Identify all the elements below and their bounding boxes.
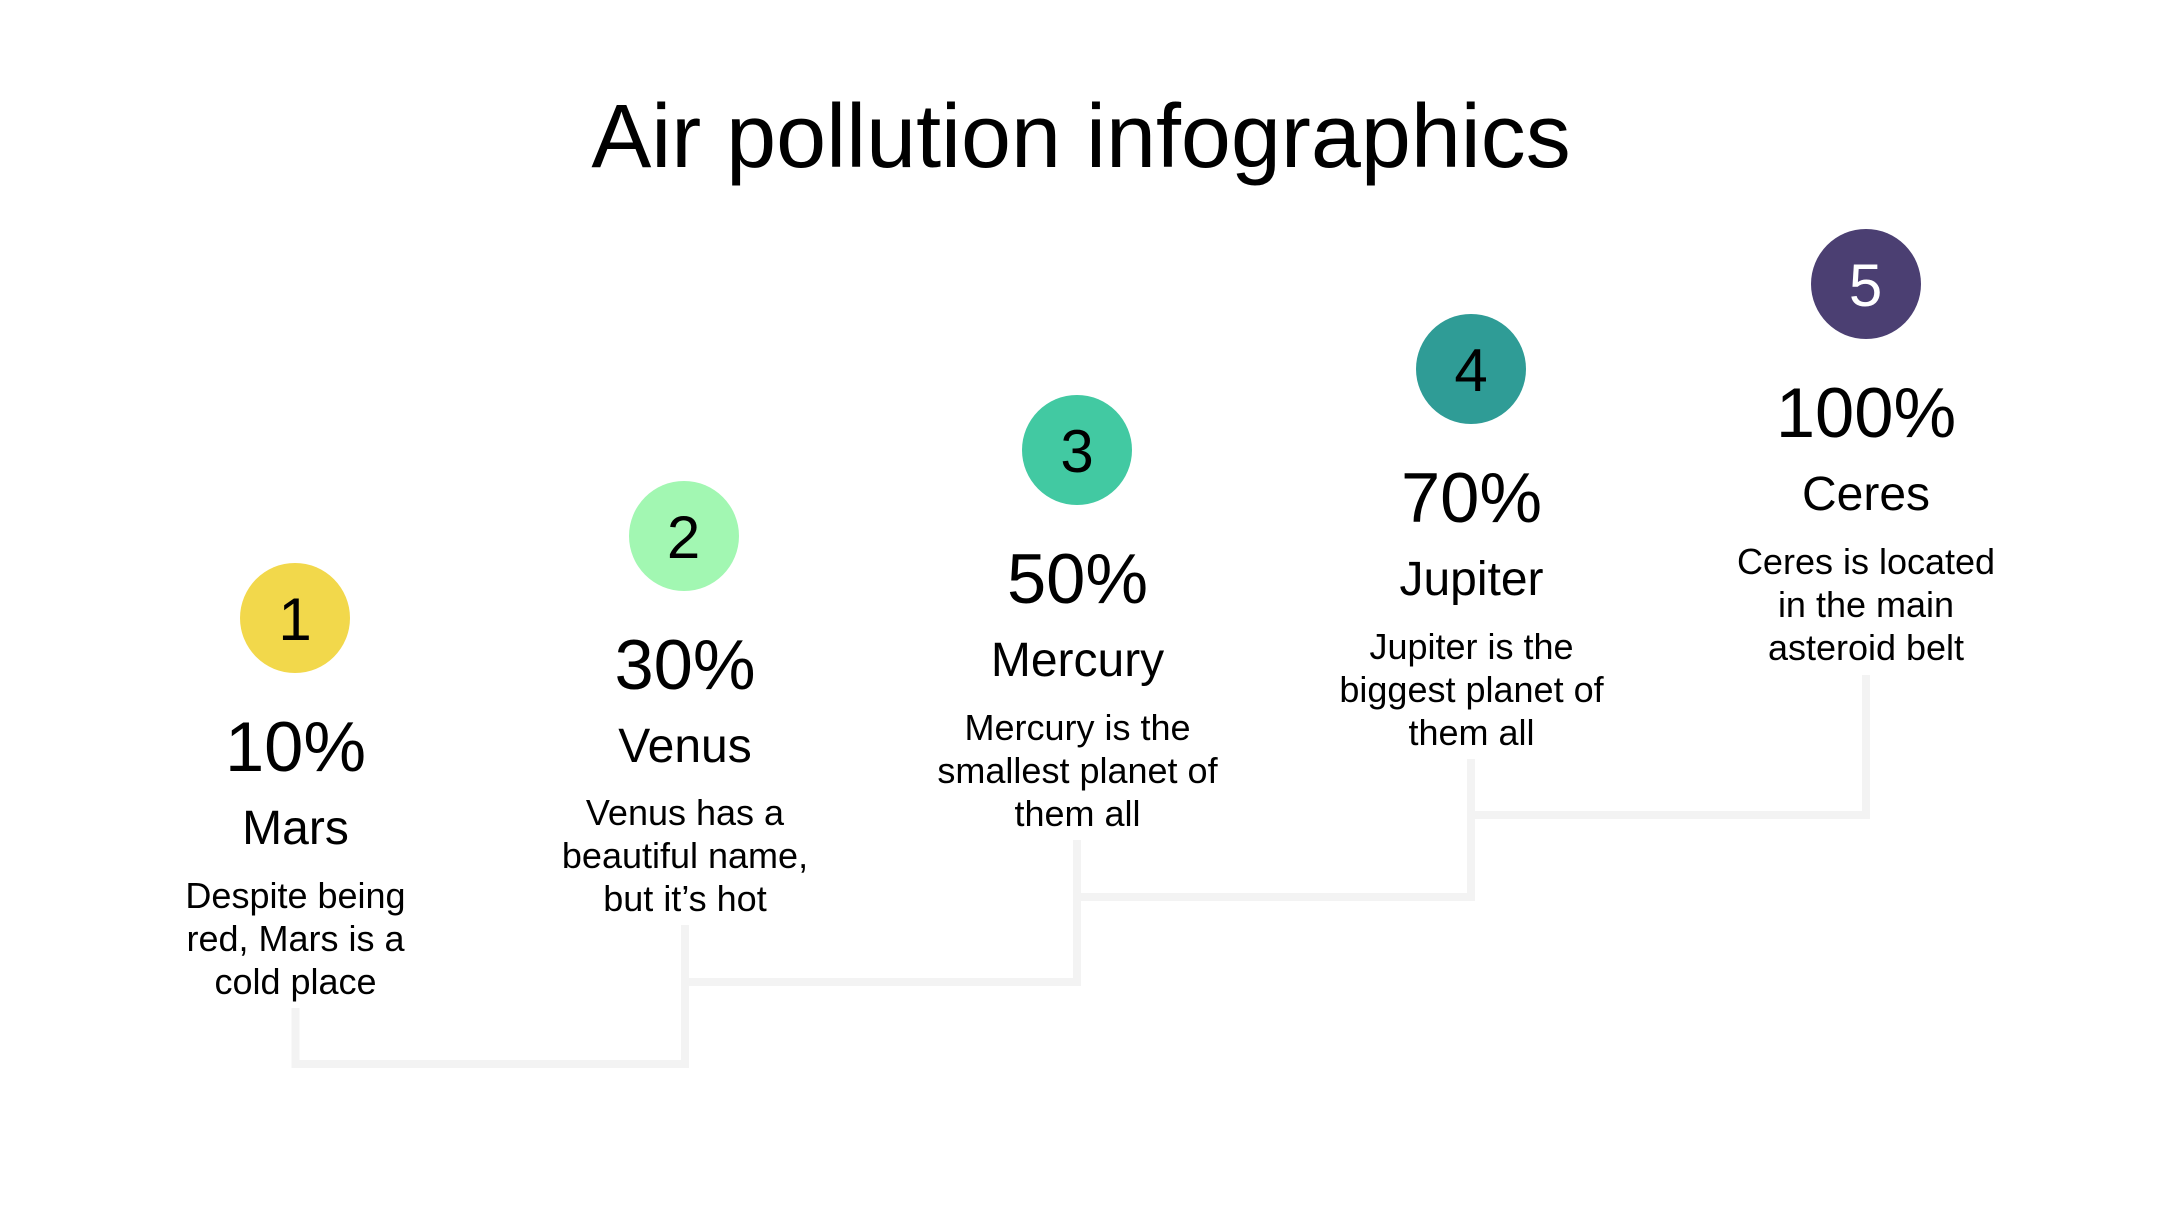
description Mars (185, 874, 406, 1002)
connector: step 3 to step 4 (1077, 759, 1471, 897)
icon: number circle 4: 4 (1454, 337, 1488, 404)
icon: number circle 2: 2 (667, 504, 700, 570)
percentage 30%: 30% (614, 624, 756, 704)
panel: step 4 Jupiter (1339, 314, 1604, 753)
description Mars: Despite being (185, 874, 406, 916)
connector: step 4 to step 5 (1471, 675, 1866, 815)
panel: step 2 Venus (562, 481, 808, 919)
description Jupiter: biggest planet of (1339, 669, 1604, 710)
description Jupiter: them all (1408, 712, 1535, 753)
panel: step 3 Mercury (937, 395, 1218, 834)
icon: number circle 2 (628, 480, 738, 590)
description Venus: Venus has a (586, 792, 784, 833)
connector: step 2 to step 3 (685, 840, 1077, 982)
description Ceres (1737, 540, 1995, 668)
description Jupiter (1339, 626, 1604, 753)
title: Air pollution infographics (591, 87, 1571, 187)
description Jupiter: Jupiter is the (1369, 626, 1574, 666)
description Mercury: them all (1014, 793, 1141, 834)
heading Ceres: Ceres (1802, 468, 1930, 521)
description Ceres: asteroid belt (1768, 627, 1964, 668)
description Venus (562, 792, 808, 919)
heading Mercury: Mercury (991, 634, 1164, 687)
icon: number circle 1: 1 (278, 586, 312, 653)
panel: step 1 Mars (185, 563, 406, 1002)
heading Jupiter: Jupiter (1399, 553, 1544, 606)
connector: step 1 to step 2 (296, 925, 685, 1064)
percentage 50%: 50% (1007, 539, 1148, 618)
description Ceres: in the main (1778, 584, 1954, 625)
description Ceres: Ceres is located (1737, 540, 1995, 582)
panel: step 5 Ceres (1737, 229, 1995, 668)
description Venus: but it’s hot (603, 878, 767, 919)
icon: number circle 5: 5 (1849, 252, 1882, 319)
icon: number circle 4 (1416, 314, 1526, 424)
percentage 10%: 10% (225, 707, 366, 786)
icon: number circle 1 (240, 563, 350, 673)
icon: number circle 5 (1810, 229, 1920, 339)
description Mercury: Mercury is the (964, 706, 1191, 748)
description Mercury: smallest planet of (937, 750, 1218, 791)
heading Venus: Venus (618, 720, 752, 772)
description Mars: cold place (214, 961, 377, 1002)
percentage 100%: 100% (1776, 373, 1956, 452)
description Venus: beautiful name, (562, 835, 808, 876)
icon: number circle 3: 3 (1060, 418, 1094, 485)
description Mars: red, Mars is a (186, 918, 405, 959)
percentage 70%: 70% (1401, 458, 1542, 537)
heading Mars: Mars (242, 802, 349, 855)
description Mercury (937, 706, 1218, 834)
icon: number circle 3 (1022, 395, 1132, 505)
